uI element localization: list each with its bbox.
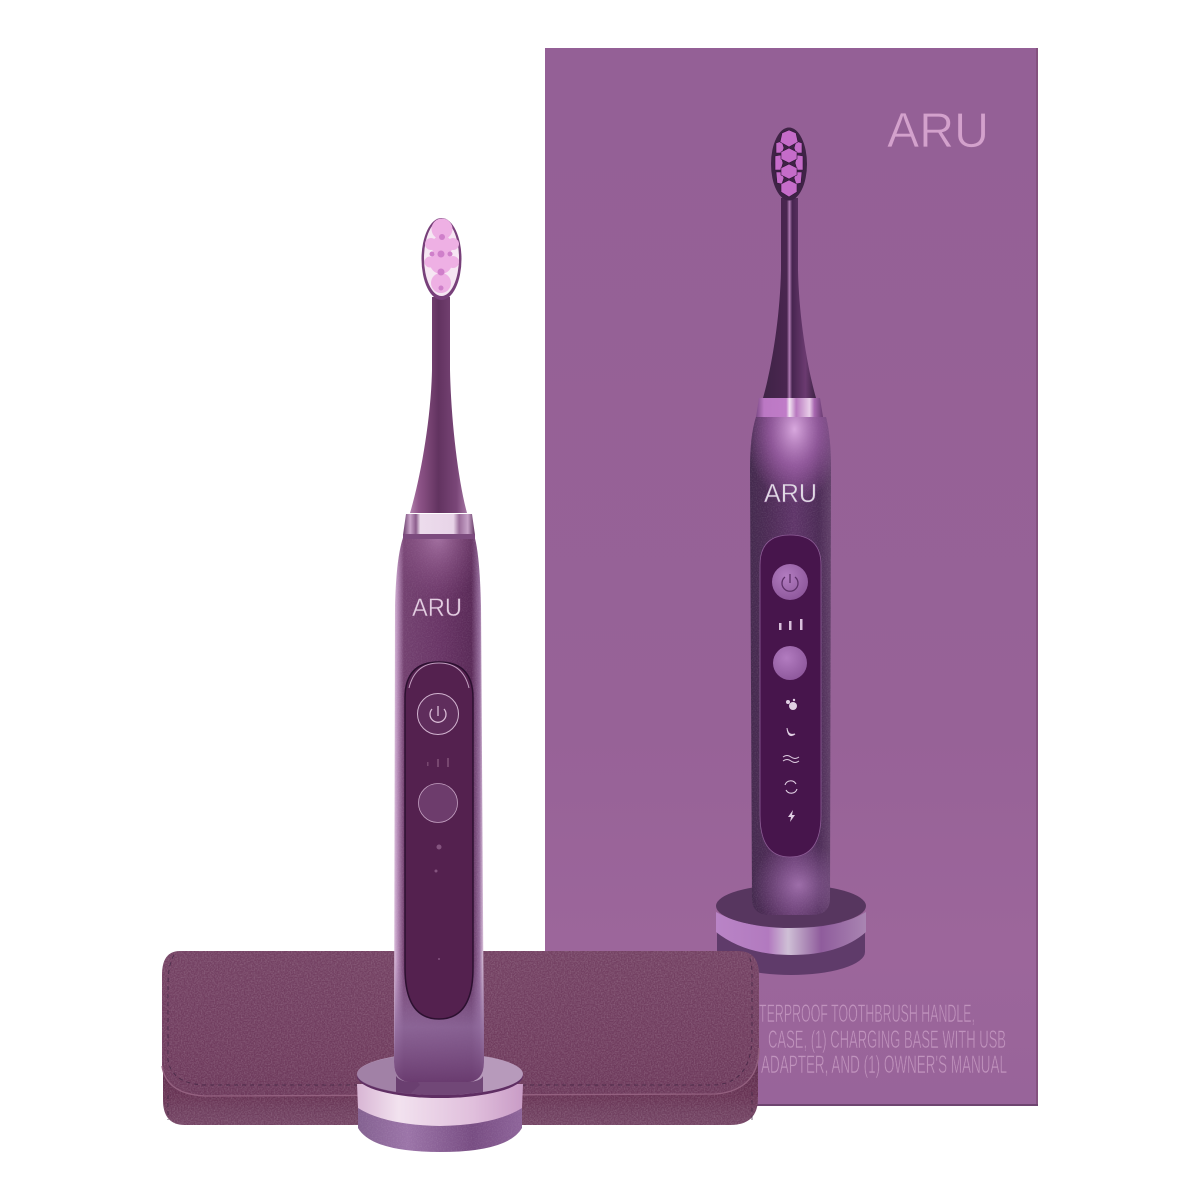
case flap [162,951,759,1096]
mode indicator bars [779,619,802,630]
faint mode icons [434,844,442,960]
box logo: ARU [887,104,989,158]
box brush charging base [716,884,866,975]
charging base [357,1053,523,1152]
mode button [418,784,458,822]
box brush logo: ARU [764,478,817,508]
box brush head [771,128,807,200]
toothbrush with stand [357,218,523,1152]
icon: cycle [785,781,797,793]
box brush handle [750,417,831,915]
handle [394,535,484,1082]
travel case [162,951,759,1125]
case stitching [168,955,752,1085]
icon: power button [418,694,458,734]
mode button [773,646,807,680]
icon: power button [772,564,808,600]
box contents text: TERPROOF TOOTHBRUSH HANDLE, [759,1000,975,1028]
handle foot shadow [396,1076,483,1095]
box contents text [759,1000,1007,1079]
case lower body [163,1060,758,1125]
handle logo: ARU [412,594,462,622]
icon: bolt [788,810,795,822]
control panel [405,662,473,1019]
icon: bubbles [786,699,797,710]
neck [410,297,467,513]
brush head [422,218,462,300]
box brush control panel [760,535,821,857]
icon: waves [783,756,799,762]
collar [403,514,475,535]
mode indicator bars [427,758,449,767]
icon: moon [787,728,795,736]
box brush neck [763,198,816,398]
box illustration: toothbrush [716,128,866,975]
box brush collar [756,398,823,417]
